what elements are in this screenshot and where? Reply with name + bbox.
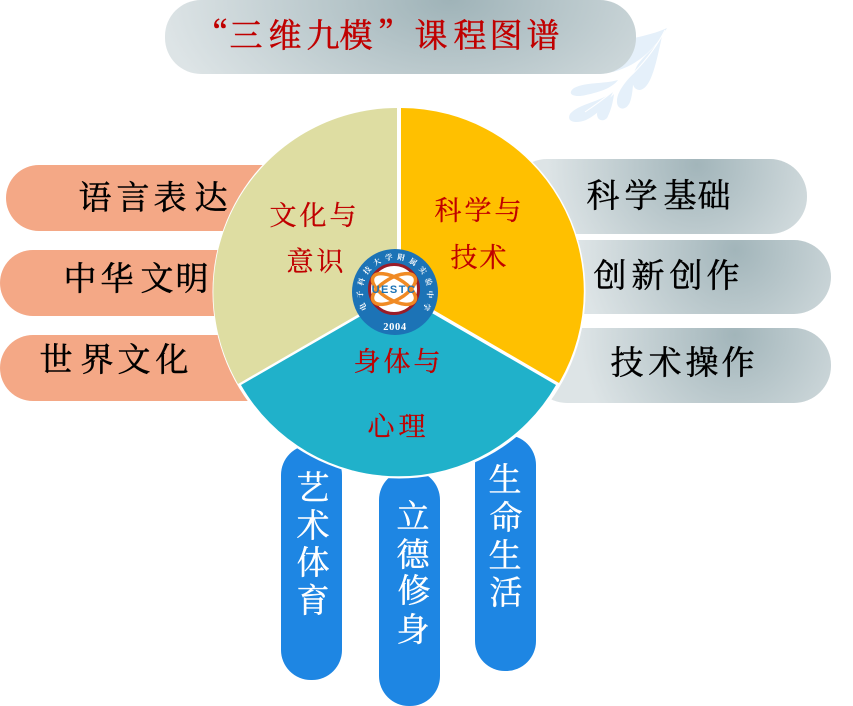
decorative leaf branch	[569, 28, 667, 122]
segment: 身体与心理	[241, 294, 556, 476]
title text: “三维九模”课程图谱	[196, 10, 560, 57]
title banner	[165, 0, 636, 74]
bottom capsule: 立德修身: 身	[396, 612, 430, 649]
logo ring text: 实	[417, 264, 430, 277]
left capsule: 语言表达: 语言表达	[78, 180, 228, 217]
logo ring text: 附	[397, 251, 406, 263]
logo ring text: 电	[357, 301, 369, 313]
right capsule: 技术操作	[530, 328, 831, 403]
left capsule: 中华文明	[0, 250, 290, 316]
logo ring text: 学	[421, 301, 433, 313]
bottom capsule: 立德修身: 德	[396, 537, 430, 574]
segment label: 身体与心理: 身体与	[354, 347, 440, 377]
school logo badge	[352, 249, 438, 335]
logo ring text: 验	[423, 277, 435, 287]
bottom capsule: 艺术体育: 艺	[296, 471, 330, 507]
logo ring text: 学	[384, 251, 394, 263]
segment label: 科学与技术: 科学与	[434, 196, 522, 226]
segment: 科学与技术	[401, 108, 584, 383]
bottom capsule: 生命生活: 生	[488, 462, 522, 499]
left capsule: 世界文化	[0, 335, 290, 401]
bottom capsule: 艺术体育: 育	[296, 583, 330, 620]
logo ring text: 属	[407, 255, 419, 268]
bottom capsule: 生命生活: 命	[490, 500, 522, 537]
bottom capsule: 立德修身	[379, 470, 440, 706]
logo ring text: 技	[361, 264, 374, 276]
segment label: 科学与技术: 技术	[450, 243, 506, 273]
bottom capsule: 生命生活: 活	[490, 576, 522, 612]
right capsule: 科学基础: 科学基础	[586, 178, 730, 215]
right capsule: 创新创作	[530, 240, 831, 314]
logo ring text: 大	[371, 255, 383, 268]
bottom capsule: 生命生活: 生	[488, 538, 522, 575]
logo ring text: 子	[355, 290, 365, 298]
segment label: 文化与意识	[270, 201, 356, 277]
logo ring text: 科	[355, 276, 367, 287]
segment label: 文化与意识: 文化与	[270, 201, 356, 231]
bottom capsule: 艺术体育: 体	[296, 545, 330, 582]
bottom capsule: 艺术体育	[281, 445, 342, 680]
segment label: 身体与心理: 心理	[368, 412, 426, 442]
bottom capsule: 立德修身: 修	[398, 573, 430, 610]
right capsule: 创新创作: 创新创作	[594, 258, 740, 295]
bottom capsule: 生命生活	[475, 435, 536, 671]
logo ring text	[355, 251, 436, 313]
left capsule: 世界文化: 世界文化	[40, 342, 188, 379]
left capsule: 语言表达	[6, 165, 296, 231]
school logo badge: 2004	[383, 322, 407, 333]
logo ring text: 中	[425, 290, 436, 299]
bottom capsule: 立德修身: 立	[396, 499, 430, 536]
bottom capsule: 艺术体育: 术	[296, 508, 330, 545]
right capsule: 科学基础	[510, 159, 807, 234]
segment: 文化与意识	[213, 108, 397, 384]
segment label: 文化与意识: 意识	[286, 247, 344, 277]
school logo badge: UESTC	[372, 284, 416, 296]
segment label: 科学与技术	[434, 196, 522, 273]
left capsule: 中华文明: 中华文明	[64, 261, 208, 298]
pie chart	[212, 106, 586, 478]
segment label: 身体与心理	[354, 347, 440, 442]
right capsule: 技术操作: 技术操作	[610, 345, 754, 382]
